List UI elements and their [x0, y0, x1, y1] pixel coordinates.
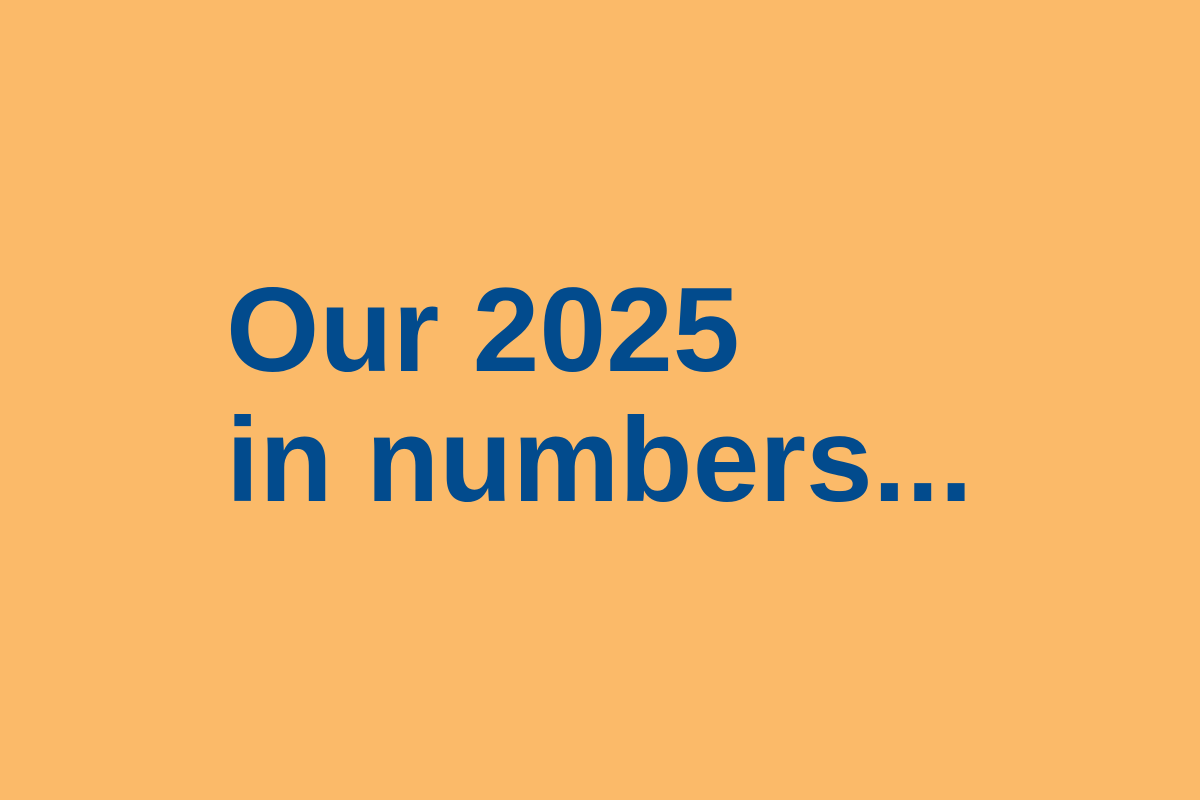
title [226, 263, 973, 527]
title: Our 2025 [226, 263, 740, 397]
title: in numbers... [226, 393, 973, 527]
